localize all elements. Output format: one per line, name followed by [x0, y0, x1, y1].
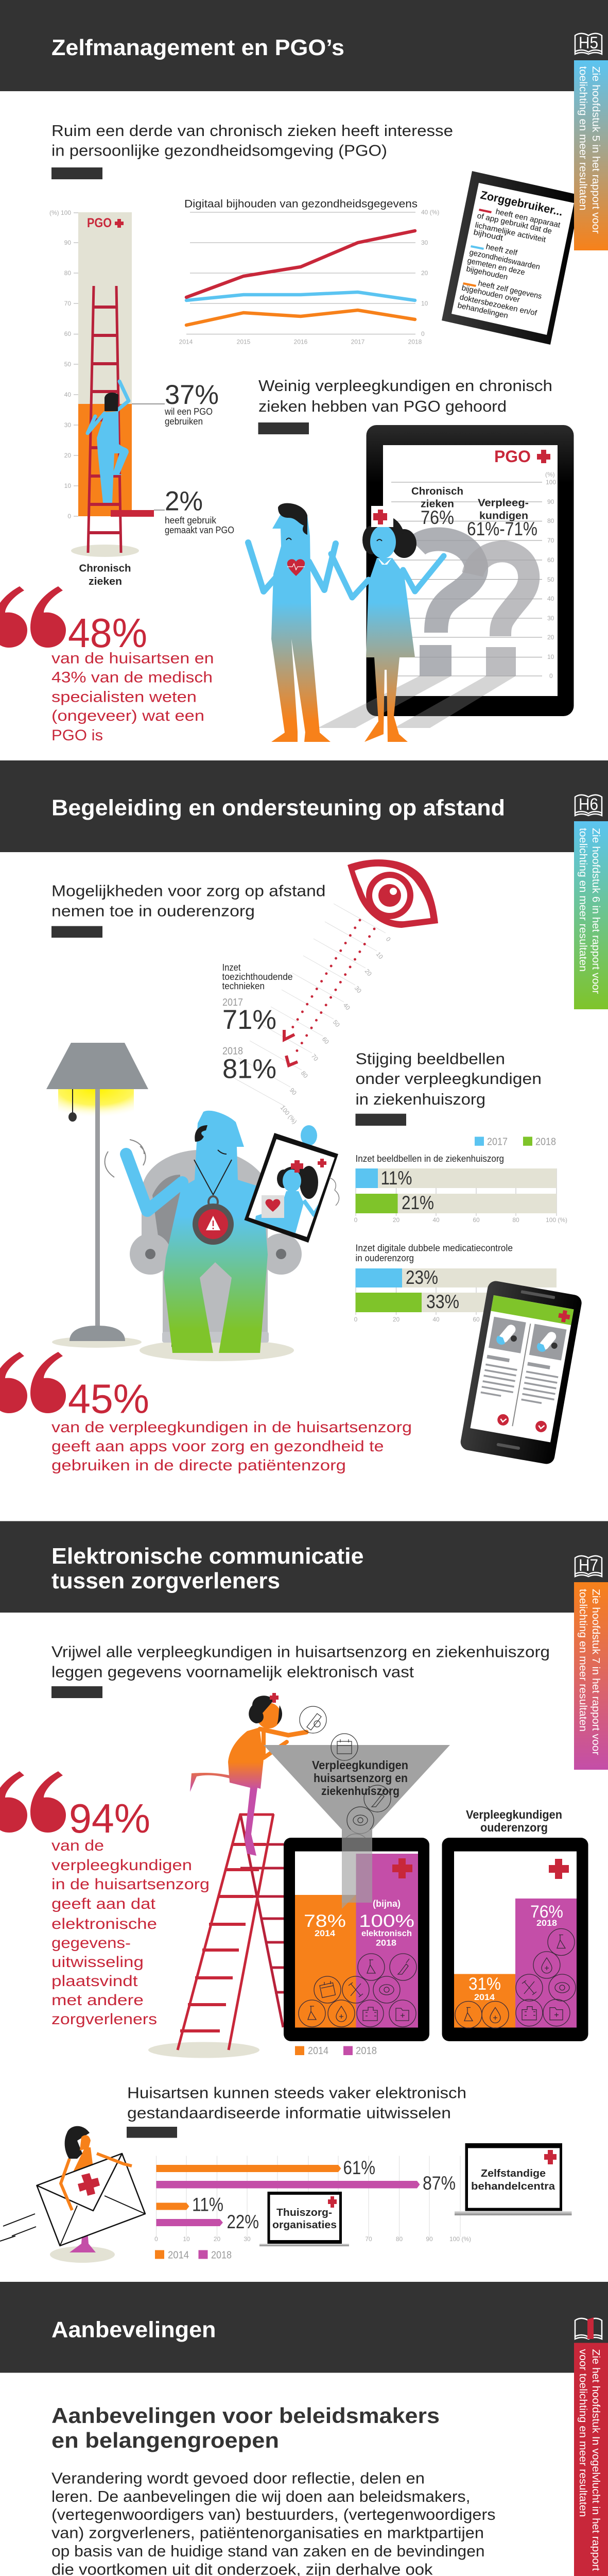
heading: stijging beeldbellen: in ziekenhuiszorg [355, 1090, 485, 1108]
heading: weinig verpleegkundigen: zieken hebben van PGO gehoord [258, 397, 507, 415]
tablet: ouderenzorg: 2014 [474, 1992, 495, 2002]
tablet: huisartsenzorg en ziekenhuiszorg [284, 1829, 429, 2041]
tablet: huisartsenzorg en ziekenhuiszorg: 100% [359, 1911, 414, 1931]
arrow bar chart: gestandaardiseerde uitwisseling [154, 2156, 471, 2261]
tablet legend: zorggebruiker: heeft een apparaat [495, 207, 562, 230]
heading: stijging beeldbellen: Stijging beeldbellen [355, 1050, 505, 1067]
header band [0, 0, 608, 91]
tablet legend: zorggebruiker [442, 171, 581, 345]
chart: dotted radial scale: 10 [375, 951, 385, 960]
quote: 94 percent: gegevens- [51, 1935, 131, 1952]
arrow bar chart: gestandaardiseerde uitwisseling: 11% [192, 2194, 223, 2215]
chart: dotted radial scale: 70 [310, 1053, 320, 1062]
chart: dotted radial scale: 30 [353, 985, 363, 994]
tablet: huisartsenzorg en ziekenhuiszorg: 78% [304, 1911, 346, 1931]
legend 2017 2018 [475, 1137, 556, 1148]
bar chart: beeldbellen: 0 [354, 1216, 358, 1224]
bar chart: medicatiecontrole: 60 [473, 1316, 480, 1323]
quote: 94 percent: met andere [51, 1992, 144, 2009]
tablet legend: zorggebruiker: doktersbezoeken en/of [459, 293, 538, 318]
video call tablet [244, 1133, 339, 1243]
arrow bar chart: gestandaardiseerde uitwisseling: 100 (%) [449, 2235, 471, 2243]
chart: dotted radial scale: 20 [363, 968, 373, 977]
icon: book H6: H6 [579, 795, 598, 814]
legend: 2014 [168, 2249, 189, 2261]
bar chart: beeldbellen: 20 [393, 1216, 399, 1224]
bar chart: medicatiecontrole: 33% [426, 1291, 459, 1312]
title: Aanbevelingen [51, 2317, 216, 2342]
line chart: digitaal bijhouden: 0 [421, 330, 425, 337]
chart: dotted radial scale: 50 [332, 1019, 341, 1028]
heading: ouderenzorg: nemen toe in ouderenzorg [51, 902, 255, 920]
arrow bar chart: gestandaardiseerde uitwisseling: 30 [244, 2235, 251, 2243]
bar chart: medicatiecontrole: 23% [406, 1267, 438, 1288]
section: Begeleiding en ondersteuning [0, 760, 608, 1474]
line chart: digitaal bijhouden: 2016 [294, 338, 308, 345]
legend: 2018 [211, 2249, 232, 2261]
tablet legend: zorggebruiker: gezondheidswaarden [468, 248, 541, 272]
stats: toezichthoudende technieken: 2018 [222, 1046, 243, 1057]
tablet: ouderenzorg: 2018 [536, 1918, 557, 1928]
intro paragraph: op basis van de huidige stand van zaken en de bevindingen [51, 2542, 485, 2560]
quote: 94 percent: geeft aan dat [51, 1895, 156, 1912]
bar chart: beeldbellen: 100 (%) [546, 1216, 567, 1224]
question mark bars and shadows [318, 539, 529, 728]
bar chart: medicatiecontrole: 0 [354, 1316, 358, 1323]
alarm pendant [193, 1160, 234, 1245]
side tab: chapter reference [574, 60, 608, 250]
chart: dotted radial scale: 40 [342, 1002, 352, 1011]
section: Elektronische communicatie [0, 1521, 608, 2263]
tablet: ouderenzorg: 31% [468, 1974, 501, 1994]
arrow bar chart: gestandaardiseerde uitwisseling: 70 [365, 2235, 372, 2243]
title: Zelfmanagement en PGO’s [51, 35, 344, 60]
side tab: chapter reference: Zie hoofdstuk 5 in het rapport voor [590, 66, 601, 234]
labels in tablet chart: 76% [421, 507, 454, 528]
bar chart: beeldbellen: 60 [473, 1216, 480, 1224]
stat 2 percent: gemaakt van PGO [165, 525, 234, 535]
tablet legend: zorggebruiker: gemeten en deze [466, 256, 526, 277]
heading: ouderenzorg: Mogelijkheden voor zorg op afstand [51, 882, 325, 900]
laptop: zelfstandige behandelcentra: behandelcentra [471, 2181, 555, 2192]
chart: dotted radial scale: 60 [321, 1036, 331, 1045]
chart: PGO column with ladder: 10 [64, 482, 71, 489]
quote: 45 percent: geeft aan apps voor zorg en gezondheid te [51, 1438, 384, 1455]
tablet: huisartsenzorg en ziekenhuiszorg: 2014 [315, 1928, 336, 1938]
intro paragraph: (vertegenwoordigers van) bestuurders, (vertegenwoordigers [51, 2505, 496, 2523]
tablet legend: zorggebruiker: Zorggebruiker... [479, 188, 564, 218]
funnel with icons [264, 1706, 450, 1903]
quote: 94 percent: uitwisseling [51, 1954, 144, 1971]
big tablet with PGO chart: 50 [547, 576, 554, 583]
heading: stijging beeldbellen: onder verpleegkundigen [355, 1070, 542, 1088]
figure: nurse shrugging [331, 506, 444, 742]
label: verpleegkundigen ouderenzorg: Verpleegkundigen [466, 1808, 562, 1821]
red 2 percent bar [111, 510, 154, 517]
chart: dotted radial scale: 80 [300, 1070, 309, 1079]
stats: toezichthoudende technieken: 81% [222, 1054, 276, 1084]
chart: dotted radial scale: 100 (%) [279, 1104, 298, 1125]
side tab: Zie hoofdstuk 7 in het rapport voor [590, 1589, 601, 1755]
arrow bar chart: gestandaardiseerde uitwisseling: 22% [227, 2211, 259, 2232]
quote: 48 percent: PGO is [51, 727, 103, 744]
label: verpleegkundigen huisartsenzorg en ziekenhuiszorg: Verpleegkundigen [312, 1758, 408, 1772]
line chart: digitaal bijhouden: 2018 [408, 338, 422, 345]
line chart: digitaal bijhouden: 2015 [237, 338, 251, 345]
tablet: ouderenzorg [442, 1838, 588, 2041]
quote: 45 percent: 45% [68, 1376, 149, 1422]
line chart: digitaal bijhouden: 40 (%) [421, 209, 439, 216]
stat 2 percent: 2% [165, 486, 203, 516]
bar chart: beeldbellen: 21% [402, 1192, 434, 1213]
chart: dotted radial scale: 90 [288, 1087, 298, 1096]
section: Aanbevelingen [0, 2282, 608, 2576]
side tab: chapter reference: toelichting en meer resultaten [577, 66, 588, 210]
label: chronisch zieken: zieken [89, 576, 122, 587]
heading: weinig verpleegkundigen [258, 377, 552, 434]
icon: book H5: H5 [579, 33, 598, 52]
chart: PGO column with ladder: 40 [64, 391, 71, 398]
side tab [574, 2343, 608, 2576]
legend 2017 2018: 2017 [487, 1137, 508, 1148]
labels in tablet chart [411, 486, 537, 539]
big tablet with PGO chart [318, 425, 574, 728]
legend 2014 2018 [295, 2045, 377, 2057]
side tab: Zie het hoofdstuk In vogelvlucht in het rapport [590, 2349, 601, 2571]
figure: man shrugging [248, 503, 336, 742]
bar chart: beeldbellen: 40 [432, 1216, 440, 1224]
heading: interesse in PGO: in persoonlijke gezondheidsomgeving (PGO) [51, 141, 387, 160]
line chart: digitaal bijhouden: 10 [421, 300, 428, 307]
quote: 94 percent: zorgverleners [51, 2011, 157, 2028]
side tab: voor toelichting en meer resultaten [577, 2349, 588, 2517]
chart: PGO column with ladder: 20 [64, 452, 71, 459]
header band [0, 1521, 608, 1613]
chart: PGO column with ladder: 0 [67, 513, 71, 520]
laptop: thuiszorgorganisaties: organisaties [272, 2219, 337, 2231]
heading: huisartsen kunnen: gestandaardiseerde informatie uitwisselen [127, 2104, 451, 2122]
bar chart: beeldbellen: Inzet beeldbellen in de ziekenhuiszorg [355, 1154, 504, 1164]
line chart: digitaal bijhouden: Digitaal bijhouden van gezondheidsgegevens [184, 198, 418, 210]
big tablet with PGO chart: 40 [547, 595, 554, 602]
chart: PGO column with ladder: 60 [64, 330, 71, 337]
chart: PGO column with ladder: 30 [64, 421, 71, 429]
quote: 94 percent: in de huisartsenzorg [51, 1876, 210, 1893]
heading: beleidsmakers: en belangengroepen [51, 2428, 279, 2452]
stat 2 percent: heeft gebruik [165, 515, 217, 526]
chart: dotted radial scale: 0 [385, 936, 392, 943]
labels in tablet chart: 61%-71% [467, 518, 537, 539]
big tablet with PGO chart: 30 [547, 615, 554, 622]
line chart: digitaal bijhouden: 30 [421, 239, 428, 246]
stats: toezichthoudende technieken: Inzet [222, 962, 241, 973]
chart: PGO column with ladder: (%) 100 [49, 209, 71, 216]
heading: beleidsmakers: Aanbevelingen voor beleidsmakers [51, 2403, 440, 2428]
heading: beleidsmakers [51, 2403, 440, 2452]
bar chart: medicatiecontrole: in ouderenzorg [355, 1253, 414, 1263]
label: verpleegkundigen huisartsenzorg en ziekenhuiszorg [312, 1758, 408, 1798]
chart: PGO column with ladder [49, 209, 234, 587]
big tablet with PGO chart: (%) [545, 471, 555, 478]
big tablet with PGO chart: PGO [494, 447, 531, 466]
icon circles [299, 1954, 416, 2027]
illustration: floor lamp [46, 1043, 148, 1348]
tablet legend: zorggebruiker: bijhoudt [473, 228, 504, 243]
label: verpleegkundigen huisartsenzorg en ziekenhuiszorg: huisartsenzorg en [314, 1771, 408, 1785]
title [51, 1544, 363, 1594]
figure on ladder [88, 381, 129, 503]
icon circles [455, 1929, 576, 2028]
quote: 94 percent: plaatsvindt [51, 1973, 138, 1990]
bar chart: beeldbellen [354, 1154, 567, 1224]
quote: 48 percent: 48% [68, 610, 147, 656]
quote: 45 percent: van de verpleegkundigen in de huisartsenzorg [51, 1419, 412, 1436]
stat 2 percent [165, 486, 234, 535]
legend 2014 2018: 2018 [356, 2045, 377, 2057]
label: verpleegkundigen ouderenzorg [466, 1808, 562, 1834]
line chart: digitaal bijhouden: 2017 [351, 338, 365, 345]
side tab [574, 1582, 608, 1770]
heading: huisartsen kunnen: Huisartsen kunnen steeds vaker elektronisch [127, 2083, 466, 2102]
tablet legend: zorggebruiker: of app gebruikt dat de [476, 211, 552, 236]
icon: book with bookmark [575, 2317, 602, 2339]
tablet: huisartsenzorg en ziekenhuiszorg: (bijna) [373, 1899, 401, 1909]
quote: 94 percent: van de [51, 1837, 104, 1854]
stat 37 percent: gebruiken [165, 416, 203, 427]
title: Elektronische communicatie [51, 1544, 363, 1569]
laptop: zelfstandige behandelcentra [455, 2143, 571, 2215]
big tablet with PGO chart: 60 [547, 556, 554, 564]
labels in tablet chart: kundigen [479, 510, 528, 521]
tablet legend: zorggebruiker: bijgehouden [465, 264, 509, 282]
quote: 48 percent: specialisten weten [51, 688, 197, 706]
tablet legend: zorggebruiker: bijgehouden over [461, 283, 520, 304]
stat 37 percent [164, 380, 219, 427]
arrow bar chart: gestandaardiseerde uitwisseling: 0 [154, 2235, 158, 2243]
quote: 48 percent [0, 586, 214, 744]
big tablet with PGO chart: 100 [546, 479, 556, 486]
title: tussen zorgverleners [51, 1568, 280, 1594]
intro paragraph: leren. De aanbevelingen die wij doen aan beleidsmakers, [51, 2487, 471, 2505]
stats: toezichthoudende technieken [222, 962, 292, 1084]
heading: interesse in PGO: Ruim een derde van chronisch zieken heeft interesse [51, 122, 453, 140]
stat 37 percent: 37% [165, 380, 219, 410]
heading: stijging beeldbellen [355, 1050, 542, 1126]
bar chart: beeldbellen: 80 [512, 1216, 519, 1224]
section: Zelfmanagement en PGO's [0, 0, 608, 744]
side tab [574, 821, 608, 1009]
tablet legend: zorggebruiker: heeft zelf [485, 242, 518, 258]
label: chronisch zieken [79, 563, 131, 587]
big tablet with PGO chart: 80 [547, 517, 554, 524]
label: verpleegkundigen ouderenzorg: ouderenzorg [480, 1821, 548, 1834]
tablet legend: zorggebruiker: lichamelijke activiteit [474, 221, 547, 244]
bar chart: medicatiecontrole: 40 [432, 1316, 440, 1323]
bar chart: medicatiecontrole: Inzet digitale dubbele medicatiecontrole [355, 1243, 513, 1253]
quote: 94 percent: 94% [69, 1795, 150, 1841]
title: Begeleiding en ondersteuning op afstand [51, 795, 505, 820]
intro paragraph: Verandering wordt gevoed door reflectie, delen en [51, 2469, 425, 2487]
header band [0, 2282, 608, 2373]
heading: vrijwel alle verpleegkundigen: leggen gegevens voornamelijk elektronisch vast [51, 1663, 414, 1681]
laptop: zelfstandige behandelcentra: Zelfstandige [481, 2168, 546, 2179]
quote: 48 percent: (ongeveer) wat een [51, 707, 204, 724]
side tab: toelichting en meer resultaten [577, 828, 588, 972]
stats: toezichthoudende technieken: toezichthoudende [222, 972, 292, 982]
tablet legend: zorggebruiker: behandelingen [457, 301, 509, 320]
tablet: huisartsenzorg en ziekenhuiszorg: 2018 [376, 1938, 396, 1947]
legend [155, 2249, 232, 2261]
illustration: woman with envelope [0, 2126, 145, 2263]
side tab: toelichting en meer resultaten [577, 1589, 588, 1732]
big tablet with PGO chart: 70 [547, 537, 554, 544]
tablet legend: zorggebruiker: heeft zelf gegevens [477, 279, 543, 301]
heading: weinig verpleegkundigen: Weinig verpleegkundigen en chronisch [258, 377, 552, 395]
big tablet with PGO chart: 90 [547, 498, 554, 505]
header band [0, 760, 608, 852]
intro paragraph: van) zorgverleners, patiëntenorganisaties en marktpartijen [51, 2523, 484, 2542]
illustration: man in chair with alarm [105, 1111, 339, 1361]
big tablet with PGO chart: 10 [547, 653, 554, 660]
quote: 48 percent: 43% van de medisch [51, 669, 213, 686]
big tablet with PGO chart: 0 [549, 672, 553, 680]
intro paragraph [51, 2469, 498, 2576]
icon: eye [348, 859, 438, 928]
arrow bar chart: gestandaardiseerde uitwisseling: 61% [343, 2157, 375, 2178]
illustration: phone with medication app [459, 1280, 583, 1465]
heading: vrijwel alle verpleegkundigen: Vrijwel alle verpleegkundigen in huisartsenzorg en ziekenhuiszorg [51, 1642, 550, 1661]
heading: ouderenzorg [51, 882, 325, 938]
heading: interesse in PGO [51, 122, 453, 179]
line chart: digitaal bijhouden [179, 198, 439, 345]
arrow bar chart: gestandaardiseerde uitwisseling: 20 [214, 2235, 220, 2243]
stats: toezichthoudende technieken: 2017 [222, 997, 243, 1008]
chart: PGO column with ladder: 90 [64, 239, 71, 246]
arrow bar chart: gestandaardiseerde uitwisseling: 10 [183, 2235, 190, 2243]
line chart: digitaal bijhouden: 20 [421, 269, 428, 277]
tablet: ouderenzorg: 76% [530, 1902, 563, 1922]
stats: toezichthoudende technieken: 71% [222, 1005, 276, 1035]
legend 2014 2018: 2014 [308, 2045, 328, 2057]
laptop: thuiszorgorganisaties: Thuiszorg- [276, 2207, 332, 2218]
arrow bar chart: gestandaardiseerde uitwisseling: 87% [423, 2173, 456, 2194]
labels in tablet chart: Verpleeg- [478, 498, 529, 509]
label: chronisch zieken: Chronisch [79, 563, 131, 574]
label: verpleegkundigen huisartsenzorg en ziekenhuiszorg: ziekenhuiszorg [321, 1784, 399, 1798]
chart: dotted radial scale [232, 904, 392, 1125]
heading: vrijwel alle verpleegkundigen [51, 1642, 550, 1698]
laptop: thuiszorgorganisaties [259, 2192, 349, 2246]
quote: 45 percent: gebruiken in de directe patiëntenzorg [51, 1457, 346, 1474]
heading: huisartsen kunnen [127, 2083, 466, 2138]
illustration: orange nurse [190, 1693, 306, 1856]
labels in tablet chart: zieken [421, 499, 454, 510]
chart: PGO column with ladder: 50 [64, 361, 71, 368]
quote: 94 percent [0, 1771, 210, 2028]
side tab: Zie hoofdstuk 6 in het rapport voor [590, 828, 601, 994]
chart: PGO column with ladder: 80 [64, 269, 71, 277]
illustration: stepladder [148, 1814, 284, 2058]
chart: PGO column with ladder: PGO [87, 216, 112, 230]
arrow bar chart: gestandaardiseerde uitwisseling: 90 [426, 2235, 433, 2243]
big tablet with PGO chart: 20 [547, 634, 554, 641]
bar chart: beeldbellen: 11% [381, 1167, 412, 1189]
quote: 45 percent [0, 1352, 412, 1474]
legend 2017 2018: 2018 [535, 1137, 556, 1148]
stat 37 percent: wil een PGO [164, 406, 213, 417]
icon: book H7: H7 [579, 1556, 598, 1574]
tablet: huisartsenzorg en ziekenhuiszorg: elektronisch [361, 1928, 412, 1938]
quote: 94 percent: verpleegkundigen [51, 1857, 192, 1874]
arrow bar chart: gestandaardiseerde uitwisseling: 80 [396, 2235, 403, 2243]
quote: 94 percent: elektronische [51, 1916, 157, 1933]
chart: PGO column with ladder: 70 [64, 300, 71, 307]
stats: toezichthoudende technieken: technieken [222, 981, 265, 991]
bar chart: medicatiecontrole [354, 1243, 557, 1323]
bar chart: medicatiecontrole: 20 [393, 1316, 399, 1323]
line chart: digitaal bijhouden: 2014 [179, 338, 193, 345]
quote: 48 percent: van de huisartsen en [51, 650, 214, 667]
labels in tablet chart: Chronisch [411, 486, 463, 497]
